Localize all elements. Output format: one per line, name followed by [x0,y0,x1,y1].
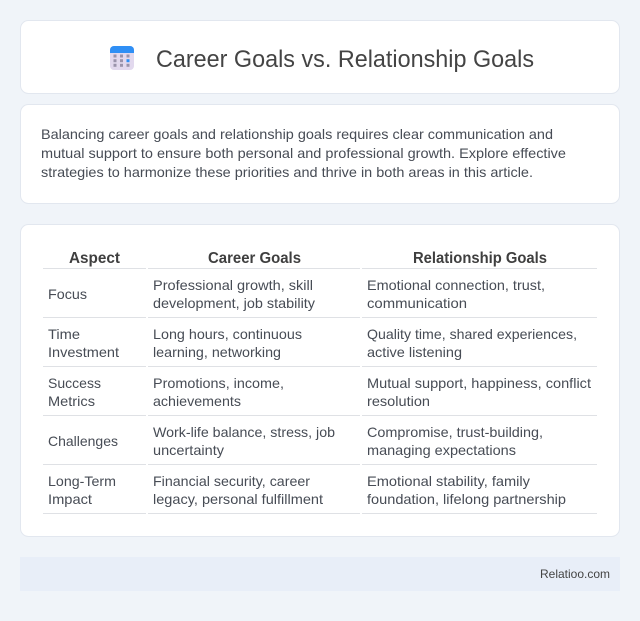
row: challenges [48,424,543,458]
row: success metrics: Metrics [48,393,95,409]
icon: calendar [110,46,134,70]
row: challenges: managing expectations [367,442,516,458]
table header [69,250,547,267]
row: focus: Emotional connection, trust, [367,277,545,293]
row: success metrics: Success [48,375,101,391]
text block: introduction: Balancing career goals and relationship goals requires clear communication and [41,126,553,142]
row: long-term impact: Financial security, career [153,473,310,489]
row: long-term impact: foundation, lifelong partnership [367,491,566,507]
row: challenges: Compromise, trust-building, [367,424,543,440]
text block: introduction [41,126,566,180]
panel: introduction [20,104,620,204]
row: time investment: Investment [48,344,119,360]
panel: title card [20,20,620,94]
row: challenges: Work-life balance, stress, job [153,424,335,440]
row: focus [48,277,545,311]
table header: Career Goals [208,250,301,267]
row: focus: Professional growth, skill [153,277,313,293]
row: time investment [48,326,577,360]
text block: introduction: strategies to harmonize these priorities and thrive in both areas in this article. [41,164,533,180]
row: focus: development, job stability [153,295,315,311]
title: Career Goals vs. Relationship Goals [156,46,534,73]
row: success metrics: Promotions, income, [153,375,284,391]
row: success metrics [48,375,591,409]
table header: Aspect [69,250,121,267]
row: long-term impact: Impact [48,491,92,507]
row: success metrics: achievements [153,393,241,409]
panel: comparison table [20,224,620,536]
footer [20,557,620,591]
table header: Relationship Goals [413,250,547,267]
text block: introduction: mutual support to ensure both personal and professional growth. Explore effective [41,145,566,161]
row: focus: communication [367,295,467,311]
row: challenges: uncertainty [153,442,224,458]
row: long-term impact: Long-Term [48,473,116,489]
row: time investment: learning, networking [153,344,281,360]
row: success metrics: resolution [367,393,430,409]
row: challenges: Challenges [48,433,118,449]
row: time investment: Quality time, shared experiences, [367,326,577,342]
row: time investment: Time [48,326,80,342]
row: success metrics: Mutual support, happiness, conflict [367,375,591,391]
row: long-term impact [48,473,566,507]
row: time investment: Long hours, continuous [153,326,302,342]
row: time investment: active listening [367,344,462,360]
footer: Relatioo.com [540,567,610,581]
row: focus: Focus [48,286,87,302]
row: long-term impact: Emotional stability, family [367,473,530,489]
row: long-term impact: legacy, personal fulfillment [153,491,323,507]
